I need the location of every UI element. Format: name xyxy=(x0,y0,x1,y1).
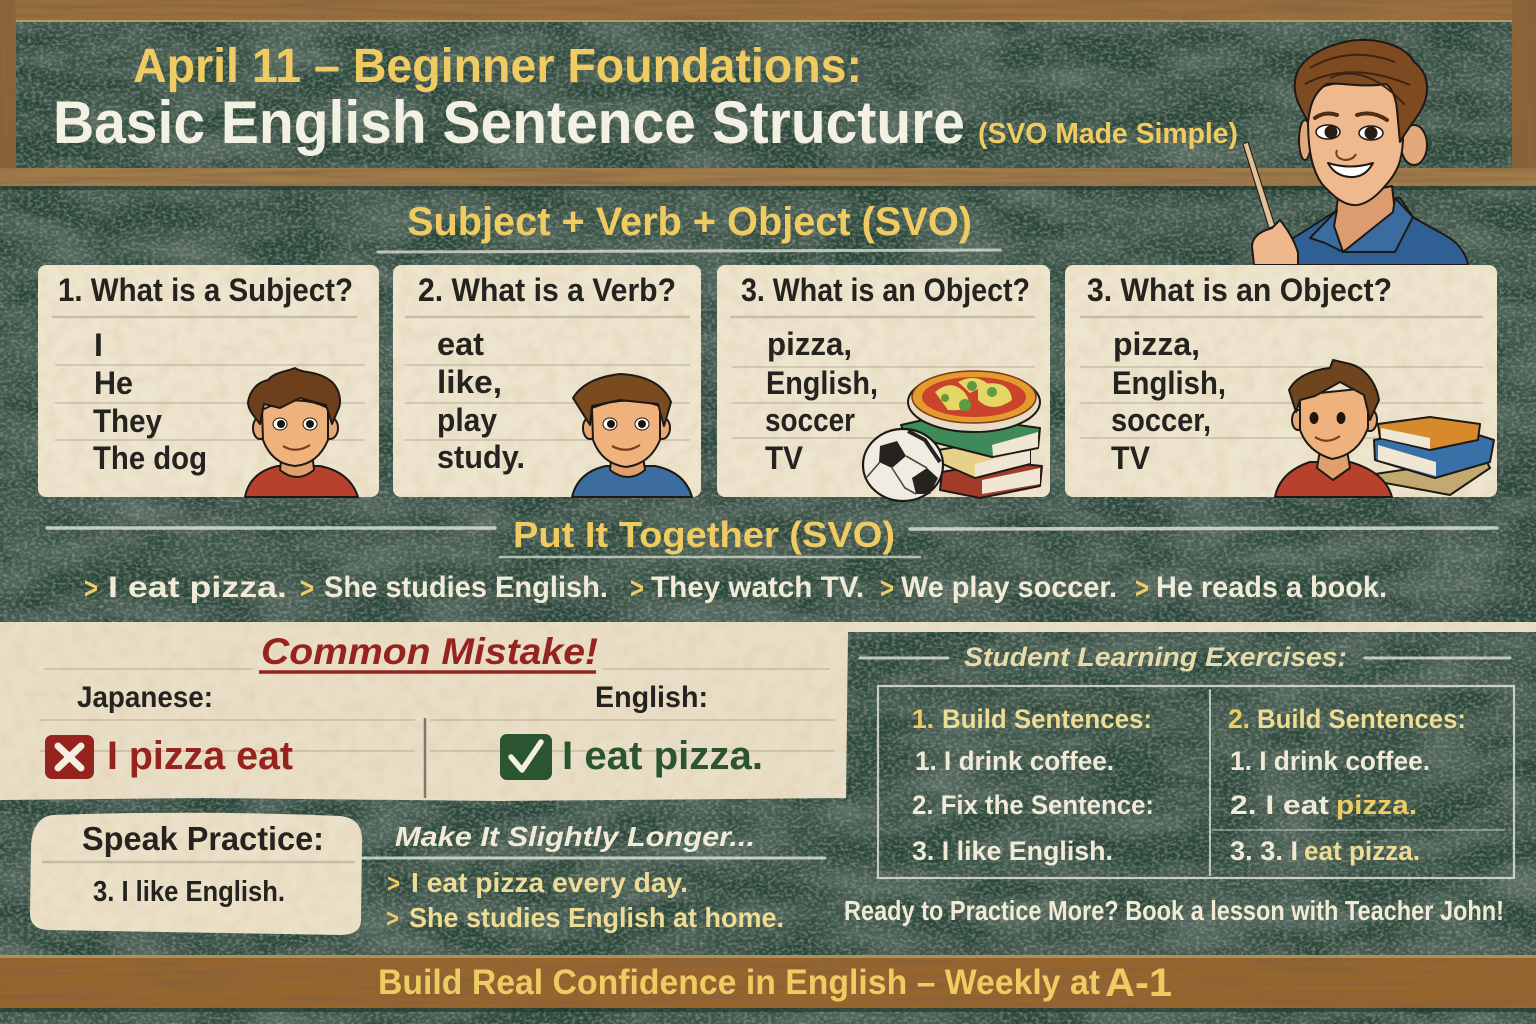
example sentences: > xyxy=(880,572,894,605)
footer banner: A-1 xyxy=(1105,961,1172,1005)
example sentences: He reads a book. xyxy=(1156,571,1387,604)
panel: common mistake: I pizza eat xyxy=(107,734,293,778)
block: make it slightly longer: I eat pizza every day. xyxy=(411,867,688,898)
left exercise column: 1. xyxy=(912,704,934,734)
right exercise column: eat pizza. xyxy=(1304,836,1420,866)
panel: speak practice xyxy=(30,813,362,935)
example sentences: I eat pizza. xyxy=(108,571,287,604)
block: make it slightly longer: She studies English at home. xyxy=(409,902,784,933)
block: make it slightly longer xyxy=(362,821,825,933)
title: Basic English Sentence Structure xyxy=(53,89,965,156)
example sentences: She studies English. xyxy=(324,571,608,604)
footer banner xyxy=(0,955,1536,1012)
panel: verb card: like, xyxy=(437,364,502,400)
block: make it slightly longer: > xyxy=(387,868,400,898)
panel: subject card: I xyxy=(94,327,103,363)
panel: second object card: soccer, xyxy=(1111,402,1211,438)
example sentences: > xyxy=(630,572,644,605)
panel: object card: 3. What is an Object? xyxy=(741,272,1030,308)
example sentences: We play soccer. xyxy=(901,571,1117,604)
icon: boy with stacked books xyxy=(1275,360,1494,497)
panel: second object card: 3. What is an Object? xyxy=(1087,272,1392,308)
panel: verb card: play xyxy=(437,402,497,438)
heading: common mistake: Common Mistake! xyxy=(261,631,598,672)
footer banner: Build Real Confidence in English – Weekly at xyxy=(378,963,1100,1002)
left exercise column: 3. I like English. xyxy=(912,836,1113,866)
panel: second object card xyxy=(1065,265,1497,497)
panel: student learning exercises xyxy=(860,642,1514,878)
panel: speak practice: Speak Practice: xyxy=(82,820,324,857)
icon: books, pizza and soccer ball xyxy=(863,371,1042,501)
right exercise column: 1. I drink coffee. xyxy=(1230,746,1430,776)
panel: subject card: He xyxy=(94,365,133,401)
panel: common mistake xyxy=(0,622,1536,801)
panel: second object card: pizza, xyxy=(1113,326,1200,362)
left exercise column: 1. I drink coffee. xyxy=(915,746,1114,776)
right exercise column: 3. 3. I xyxy=(1230,836,1298,866)
example sentences: > xyxy=(84,572,98,605)
icon: red cross xyxy=(45,735,94,779)
panel: verb card: eat xyxy=(437,326,484,362)
left exercise column: 2. Fix the Sentence: xyxy=(912,790,1154,820)
panel: subject card: The dog xyxy=(93,440,207,476)
panel: object card: soccer xyxy=(765,402,855,438)
panel: common mistake: English: xyxy=(595,681,708,714)
example sentences: > xyxy=(1135,572,1149,605)
panel: object card: pizza, xyxy=(767,326,852,362)
right exercise column: 2. xyxy=(1228,704,1250,734)
left exercise column xyxy=(912,704,1154,866)
panel: object card xyxy=(717,265,1050,501)
example sentences: They watch TV. xyxy=(651,571,864,604)
panel: second object card: TV xyxy=(1111,440,1151,476)
title: April 11 – Beginner Foundations: xyxy=(133,40,862,93)
title xyxy=(53,40,1238,156)
panel: student learning exercises: Student Learning Exercises: xyxy=(964,642,1347,672)
panel: common mistake: Japanese: xyxy=(77,681,213,714)
heading: SVO formula: Subject + Verb + Object (SVO) xyxy=(407,200,972,244)
panel: speak practice: 3. I like English. xyxy=(93,876,285,908)
panel: subject card xyxy=(38,265,379,497)
wooden header board xyxy=(0,0,1536,190)
right exercise column xyxy=(1228,704,1466,866)
block: make it slightly longer: Make It Slightly Longer... xyxy=(395,821,755,852)
panel: second object card: English, xyxy=(1112,365,1226,401)
panel: object card: English, xyxy=(766,365,878,401)
right exercise column: Build Sentences: xyxy=(1257,704,1466,734)
panel: verb card: 2. What is a Verb? xyxy=(418,272,676,308)
heading: put it together: Put It Together (SVO) xyxy=(513,514,895,555)
panel: verb card: study. xyxy=(437,439,525,475)
title: (SVO Made Simple) xyxy=(978,118,1238,150)
panel: subject card: They xyxy=(93,403,162,439)
panel: object card: TV xyxy=(765,440,804,476)
panel: subject card: 1. What is a Subject? xyxy=(58,272,353,308)
right exercise column: pizza. xyxy=(1336,790,1417,820)
panel: common mistake: I eat pizza. xyxy=(562,734,763,778)
icon: boy in blue shirt xyxy=(572,374,692,497)
example sentences xyxy=(84,571,1387,605)
block: make it slightly longer: > xyxy=(386,903,399,933)
panel: verb card xyxy=(393,265,701,497)
right exercise column: 2. I eat xyxy=(1230,790,1329,820)
left exercise column: Build Sentences: xyxy=(942,704,1152,734)
icon: boy in red shirt xyxy=(245,368,358,497)
icon: green check xyxy=(500,734,552,780)
example sentences: > xyxy=(300,572,314,605)
icon: teacher with pointer xyxy=(1243,40,1468,265)
